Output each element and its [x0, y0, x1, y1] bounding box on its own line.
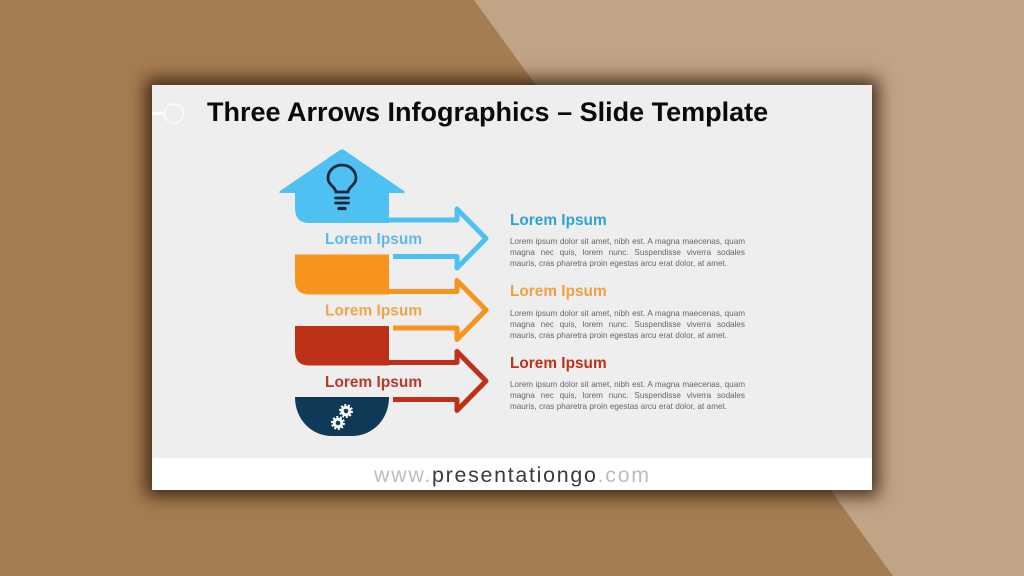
text block 1: Lorem ipsum dolor sit amet, nibh est. A magna maecenas, quam	[510, 237, 745, 246]
text block 3	[510, 380, 745, 411]
icon: gears	[332, 405, 352, 429]
arrow 1: blue house with lightbulb	[279, 149, 486, 268]
arrow 2: orange	[295, 254, 486, 340]
diagram: three arrows	[279, 149, 488, 436]
icon: title pin	[152, 103, 184, 124]
arrow 3: red	[295, 326, 486, 410]
text block 2: magna nec quis, lorem nunc. Suspendisse viverra sodales	[510, 320, 745, 328]
label: orange: Lorem Ipsum	[325, 302, 422, 320]
footer website text: www.presentationgo.com	[374, 463, 651, 487]
footer band	[152, 458, 872, 490]
heading 2: Lorem Ipsum	[510, 283, 607, 300]
title: Three Arrows Infographics – Slide Template	[207, 97, 768, 127]
label: blue: Lorem Ipsum	[325, 231, 422, 248]
navy bowl with gears	[295, 397, 389, 436]
heading 1: Lorem Ipsum	[510, 212, 607, 228]
text block 3: Lorem ipsum dolor sit amet, nibh est. A magna maecenas, quam	[510, 380, 745, 389]
text block 1: magna nec quis, lorem nunc. Suspendisse viverra sodales	[510, 248, 745, 257]
icon: lightbulb	[328, 165, 356, 208]
text block 2: Lorem ipsum dolor sit amet, nibh est. A magna maecenas, quam	[510, 308, 745, 318]
text block 2: mauris, cras pharetra proin egestas arcu erat dolor, at amet.	[510, 330, 727, 340]
slide panel	[152, 85, 872, 490]
text block 2	[510, 308, 745, 340]
text block 3: magna nec quis, lorem nunc. Suspendisse viverra sodales	[510, 391, 745, 400]
text block 3: mauris, cras pharetra proin egestas arcu erat dolor, at amet.	[510, 402, 727, 411]
heading 3: Lorem Ipsum	[510, 354, 607, 372]
label: red: Lorem Ipsum	[325, 374, 422, 391]
text block 1: mauris, cras pharetra proin egestas arcu erat dolor, at amet.	[510, 259, 727, 268]
text block 1	[510, 237, 745, 268]
